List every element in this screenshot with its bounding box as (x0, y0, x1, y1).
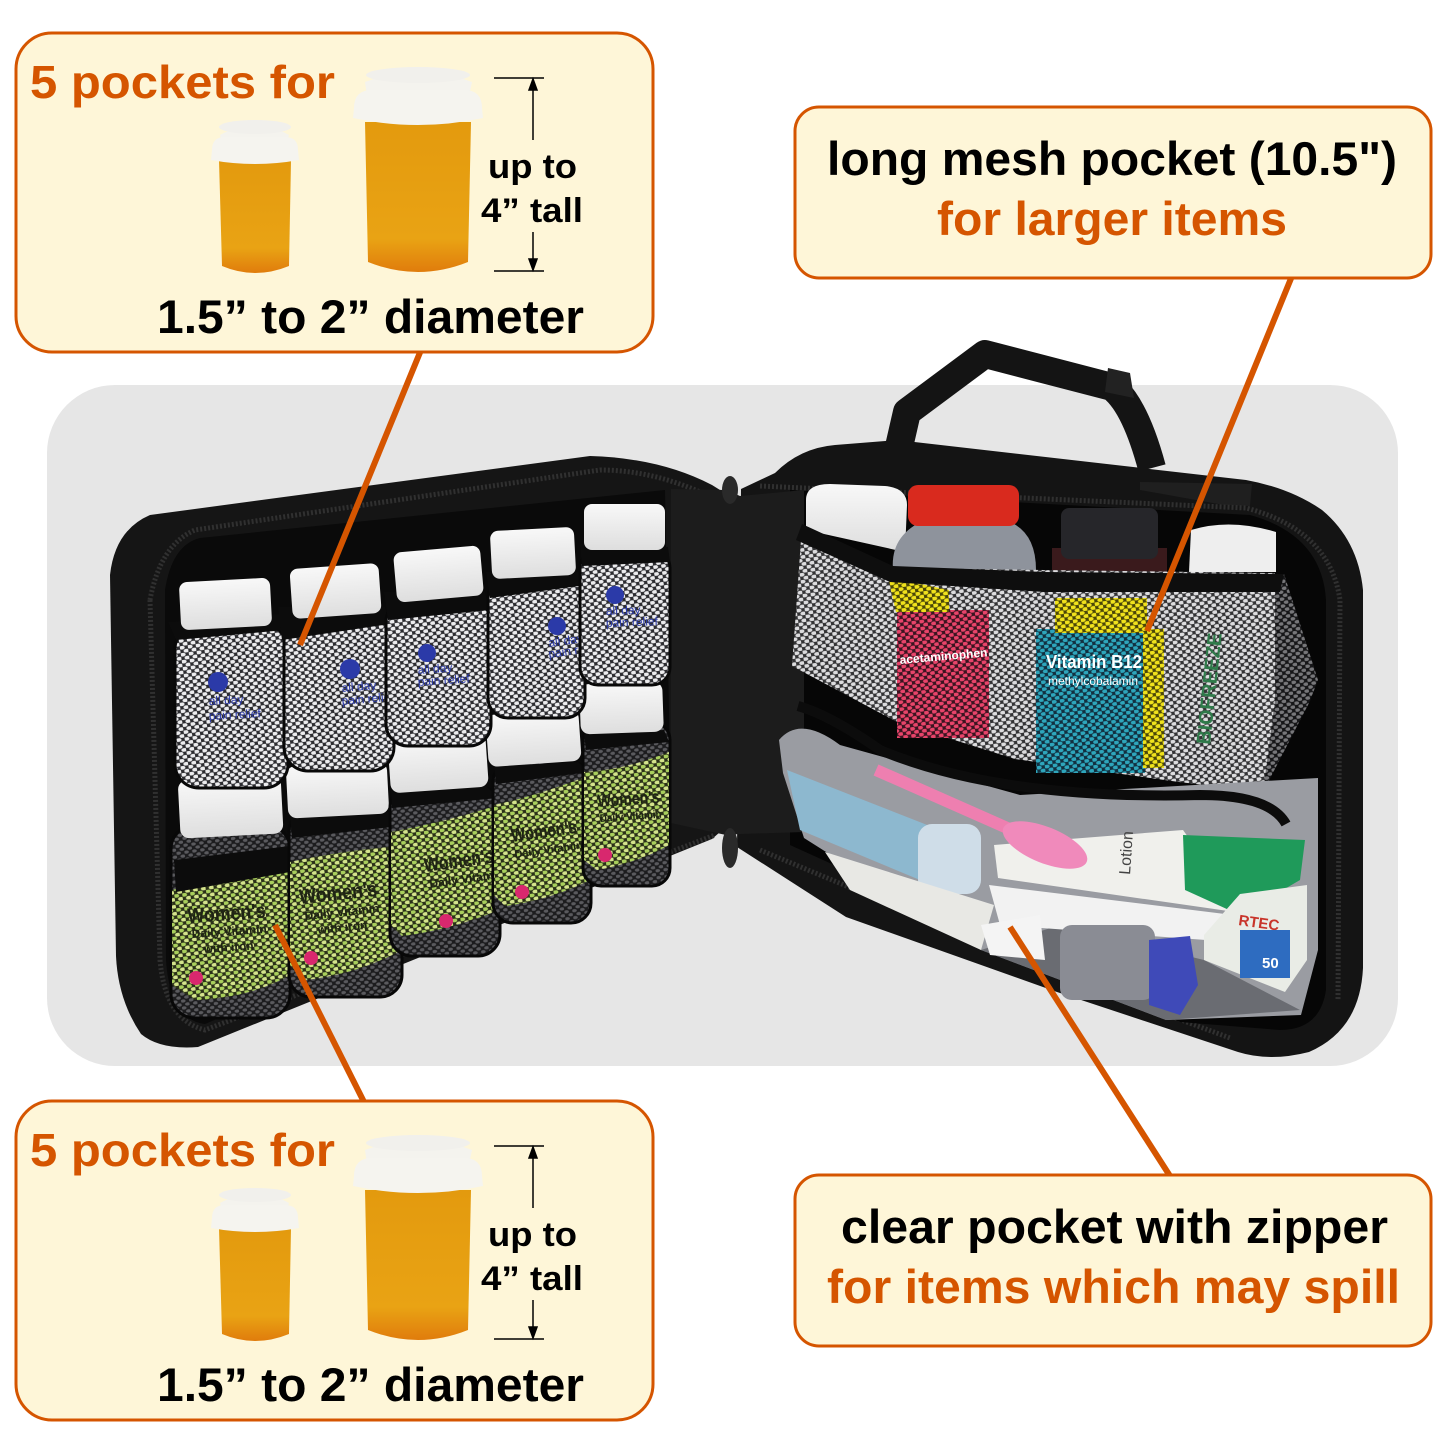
acetaminophen text: acetaminophen (899, 645, 988, 667)
4 inch tall: 4” tall (481, 192, 583, 230)
bottle 2 (286, 761, 402, 997)
bottle 1: with iron (202, 939, 254, 956)
bottle 2 (278, 563, 395, 771)
bottom zipper pull (722, 828, 738, 868)
callout box (795, 107, 1431, 278)
bottle 3: pain relief (417, 671, 471, 689)
4 inch tall: 4” tall (481, 1260, 583, 1298)
bottle 1 (168, 578, 288, 788)
left panel zipper (150, 470, 715, 1030)
bottle 4: all day (547, 631, 584, 650)
dark bottom film (981, 925, 1300, 1020)
bottle 1: Women's (187, 900, 266, 928)
bottle 5 (580, 504, 670, 685)
blue label (1036, 629, 1145, 773)
top zipper pull (722, 476, 738, 504)
black capped bottle (1052, 508, 1167, 578)
line one: clear pocket with zipper (841, 1200, 1388, 1253)
top row bottles (168, 504, 670, 788)
mesh body (792, 526, 1275, 792)
callout: clear pocket (795, 1175, 1431, 1346)
left panel lining (165, 490, 671, 1024)
bottle 1: Daily Vitamin (191, 922, 267, 941)
paper leaflet (825, 852, 994, 950)
razor case (1060, 925, 1155, 1000)
leader line: mesh pocket callout (1147, 276, 1292, 631)
yellow strip (1143, 629, 1164, 768)
toothpaste (989, 885, 1233, 942)
bottle 5: Daily Vitamin (599, 809, 662, 825)
bottle 4 (486, 527, 602, 718)
bottle 1 (171, 775, 290, 1018)
callout: top-left pockets (16, 33, 653, 352)
white cap (806, 484, 907, 552)
small pill bottle (211, 1188, 299, 1341)
heading: 5 pockets for (30, 1124, 335, 1176)
bottle 3: Daily Vitamin (428, 867, 505, 891)
bottle 2: with iron (316, 918, 368, 937)
up to: up to (488, 1216, 577, 1254)
bottle 4: Daily Vitamin (514, 839, 584, 861)
diameter: 1.5” to 2” diameter (157, 1358, 584, 1411)
bottle 5: Women's (597, 787, 660, 811)
plastic (779, 729, 1318, 1020)
callout box (16, 1101, 653, 1420)
white bottle top (1189, 524, 1276, 572)
large pill bottle (353, 67, 483, 272)
background panel (47, 385, 1398, 1066)
bottle 2: all day (341, 678, 377, 695)
left panel contents (168, 504, 670, 1018)
small bottle (918, 824, 981, 894)
red label (897, 610, 989, 738)
right panel contents (779, 484, 1318, 1020)
allergy box: 50 (1262, 955, 1279, 972)
leader line: bottom-left callout to pocket (275, 925, 364, 1102)
right panel lining (790, 490, 1326, 1030)
bottle 2: pain relief (341, 689, 395, 708)
line one: long mesh pocket (10.5") (827, 132, 1397, 185)
bottle 5: pain relief (606, 614, 659, 630)
diameter: 1.5” to 2” diameter (157, 290, 584, 343)
bottle 2: Daily Vitamin (304, 901, 380, 923)
spine body (671, 489, 804, 835)
small pill bottle (211, 120, 299, 273)
bottle 3 (384, 545, 491, 746)
lotion text: Lotion (1117, 831, 1137, 875)
bottle 1: all day (208, 692, 244, 708)
vitamin text: Vitamin B12 (1046, 652, 1142, 672)
toothpaste cap (981, 915, 1045, 960)
allergy box: RTEC (1237, 912, 1280, 935)
lotion tube (994, 830, 1242, 913)
leader line: top-left callout to pocket (300, 350, 421, 645)
bottle 3 (387, 733, 505, 956)
dark mesh edge (1260, 574, 1318, 792)
up to: up to (488, 148, 577, 186)
pink toothbrush (876, 770, 1093, 879)
callout: bottom-left pockets (16, 1101, 653, 1420)
line two: for items which may spill (827, 1260, 1400, 1313)
mesh pocket (792, 524, 1318, 792)
height dimension marker (494, 78, 544, 271)
pocket zipper (798, 706, 1286, 824)
right panel zipper (760, 486, 1340, 1038)
bottle 4: Women's (510, 817, 578, 847)
leader line: clear pocket callout (1010, 927, 1170, 1176)
strap flap (1105, 368, 1134, 398)
right panel shell (737, 440, 1363, 1057)
bottle 5: all day (606, 603, 641, 618)
right strap tab (1140, 482, 1252, 506)
yellow red label band (888, 577, 949, 612)
handle (896, 354, 1152, 468)
callout: long mesh pocket (795, 107, 1431, 278)
bottle 5 (579, 682, 670, 886)
methylcobalamin text: methylcobalamin (1048, 674, 1138, 688)
callout box (16, 33, 653, 352)
callout box (795, 1175, 1431, 1346)
bottle 1: pain relief (208, 706, 262, 723)
allergy box (1204, 885, 1307, 992)
clear zipper pocket (779, 706, 1318, 1020)
bottle 4: pain relief (547, 640, 602, 661)
bottle 3: Women's (423, 845, 495, 877)
left panel shell (110, 456, 728, 1047)
bottle 4 (485, 709, 591, 923)
height dimension marker (494, 1146, 544, 1339)
bag spine (671, 476, 804, 868)
heading: 5 pockets for (30, 56, 335, 108)
bottle 3: all day (417, 661, 453, 677)
line two: for larger items (937, 192, 1287, 245)
large pill bottle (353, 1135, 483, 1340)
yellow top band (1055, 598, 1147, 633)
bottle 2: Women's (298, 878, 378, 909)
red capped bottle (893, 485, 1036, 570)
bag shell (110, 440, 1363, 1057)
blue cap (1149, 936, 1198, 1015)
pocket band (796, 524, 1284, 592)
green cap (1183, 835, 1305, 915)
blue tube (787, 770, 940, 880)
bottom row bottles (171, 682, 670, 1018)
strap (896, 354, 1152, 468)
biofreeze text: BIOFREEZE (1193, 632, 1227, 746)
top items in mesh pocket (806, 484, 1276, 578)
